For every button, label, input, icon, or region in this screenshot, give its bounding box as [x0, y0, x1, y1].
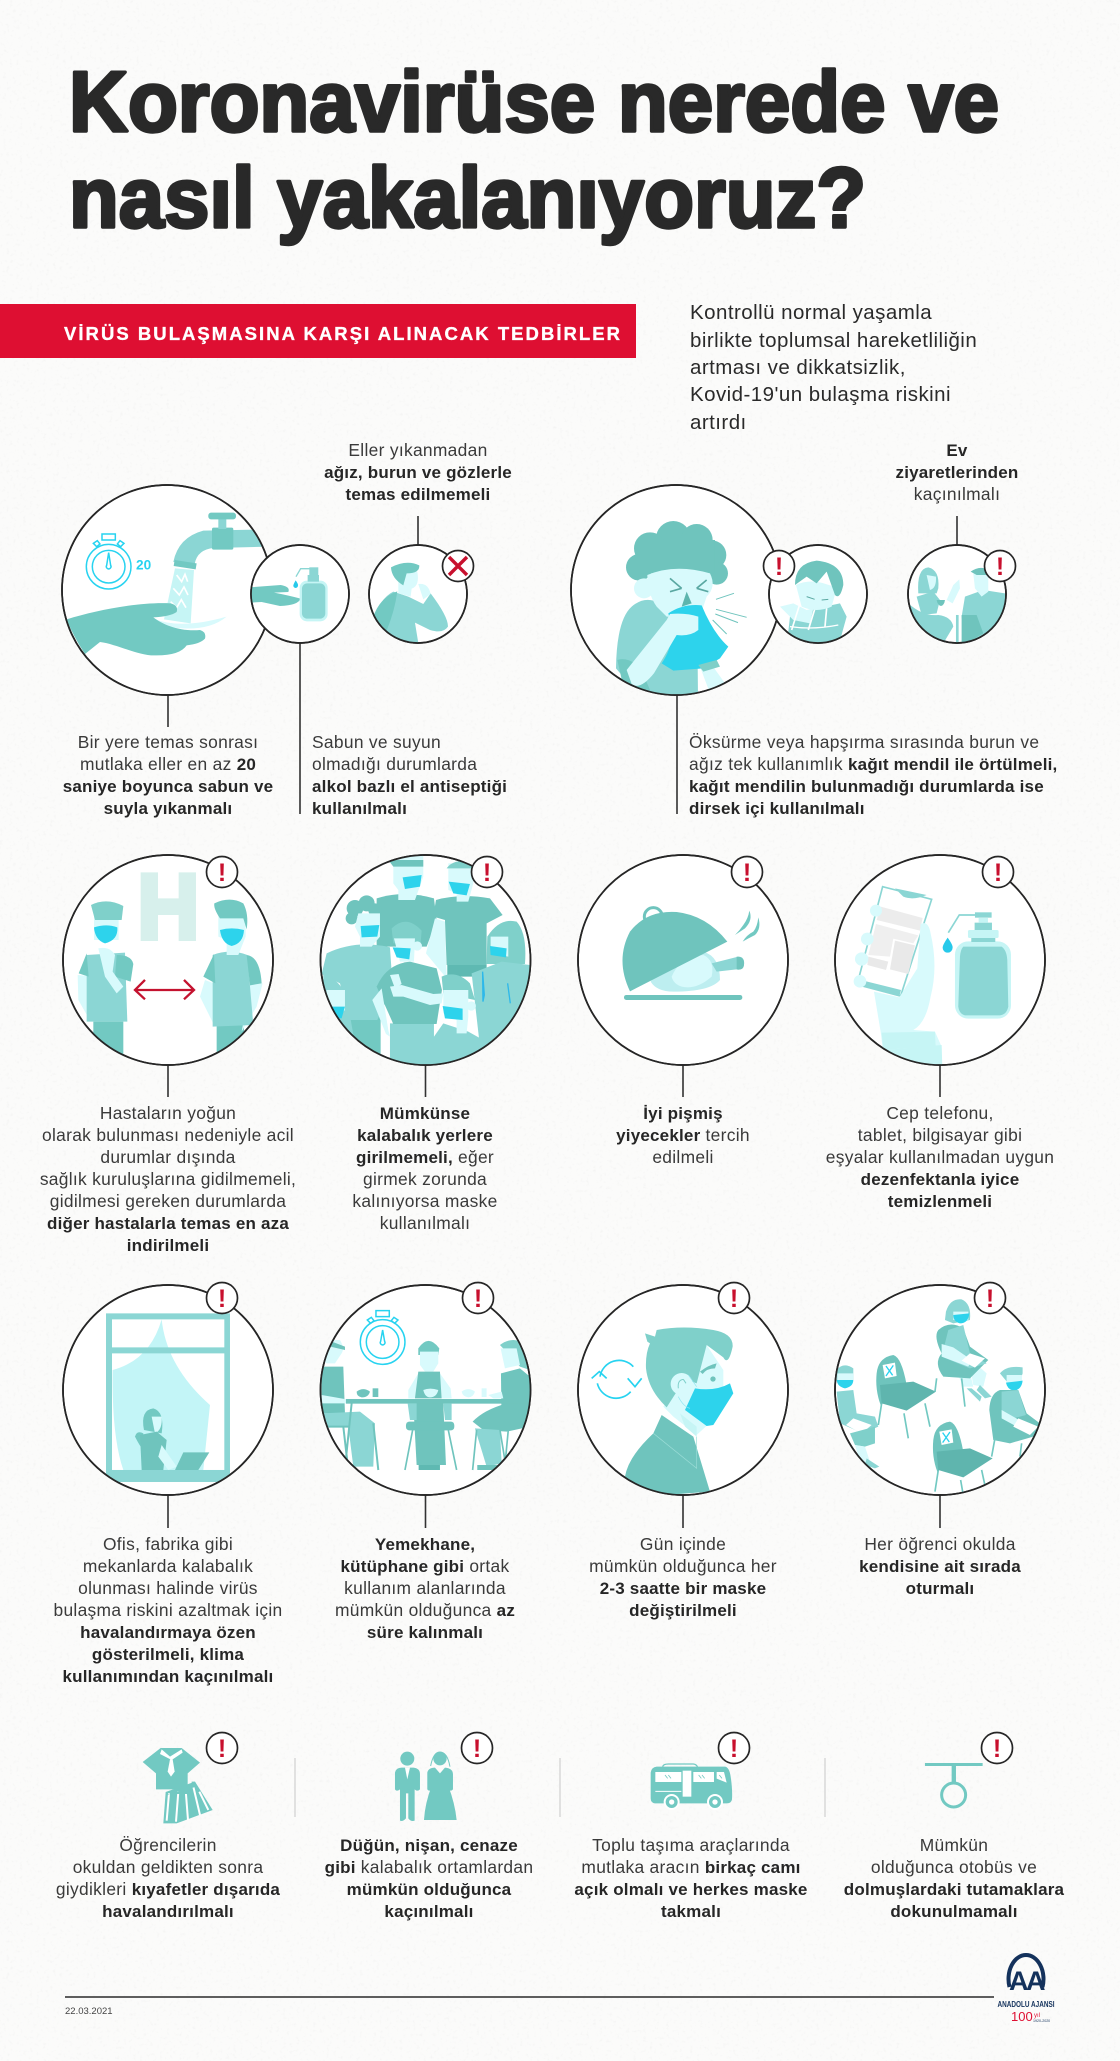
text: hospitals: olarak bulunması nedeniyle acil: [42, 1125, 294, 1145]
text: hand straps: dokunulmamalı: [890, 1902, 1018, 1921]
text: hand straps: Mümkün: [920, 1835, 988, 1855]
logo: Anadolu Ajansı: 1920-2020: [1033, 2019, 1050, 2023]
panel: man touching face illustration: [369, 545, 467, 645]
text: covering mouth when coughing: dirsek içi kullanılmalı: [689, 799, 865, 818]
text: students clothes: [56, 1835, 280, 1921]
text: alcohol based antiseptic: olmadığı durumlarda: [312, 754, 477, 774]
text: canteen and library: süre kalınmalı: [367, 1623, 483, 1642]
text: cooked food: yiyecekler tercih: [616, 1125, 750, 1145]
icon: warning badge: !: [993, 1735, 1001, 1763]
text: 20 seconds washing: mutlaka eller en az 20: [80, 754, 256, 774]
text: students clothes: giydikleri kıyafetler dışarıda: [56, 1879, 280, 1899]
top student: [935, 1299, 992, 1407]
icon: bus: [651, 1764, 732, 1810]
panel: cooked food illustration: [578, 855, 788, 1065]
text: public transport: Toplu taşıma araçlarında: [592, 1835, 790, 1855]
text: cooked food: İyi pişmiş: [643, 1104, 723, 1123]
text: students clothes: okuldan geldikten sonra: [73, 1857, 263, 1877]
icon: warning badge: !: [218, 859, 226, 887]
text: crowded places: kalınıyorsa maske: [352, 1191, 498, 1211]
text: hand straps: [844, 1835, 1065, 1921]
text: mask replacement: [589, 1534, 777, 1620]
text: weddings and funerals: gibi kalabalık ortamlardan: [325, 1857, 533, 1877]
panel: canteen table illustration: [320, 1285, 530, 1495]
text: school desks: Her öğrenci okulda: [864, 1534, 1016, 1554]
logo: Anadolu Ajansı: 100: [1011, 2009, 1033, 2024]
title: nasıl yakalanıyoruz?: [69, 151, 866, 246]
text: covering mouth when coughing: ağız tek kullanımlık kağıt mendil ile örtülmeli,: [689, 754, 1057, 774]
text: eyes and mouth warning: temas edilmemeli: [346, 485, 490, 504]
connector lines second and third rows: [168, 1064, 940, 1528]
icon: warning badge: [974, 1282, 1006, 1314]
text: home visits: [896, 441, 1018, 504]
text: covering mouth when coughing: Öksürme veya hapşırma sırasında burun ve: [689, 732, 1039, 752]
banner: measures heading: VİRÜS BULAŞMASINA KARŞI ALINACAK TEDBİRLER: [64, 323, 620, 344]
text: ventilation: mekanlarda kalabalık: [83, 1556, 253, 1576]
icon: school uniform: [143, 1748, 213, 1823]
panel: hand sanitizer illustration: [250, 545, 349, 643]
text: eyes and mouth warning: Eller yıkanmadan: [348, 440, 488, 460]
text: canteen and library: kütüphane gibi ortak: [341, 1556, 509, 1576]
panel: crowd illustration: [320, 855, 530, 1070]
text: cooked food: [616, 1104, 750, 1167]
text: ventilation: olunması halinde virüs: [78, 1578, 258, 1598]
logo: Anadolu Ajansı: [998, 1955, 1054, 2024]
icon: warning badge: !: [218, 1285, 226, 1313]
text: weddings and funerals: kaçınılmalı: [384, 1902, 474, 1921]
panel: school desks illustration: [835, 1285, 1045, 1505]
panel: hospital distance illustration: [63, 855, 273, 1065]
text: school desks: oturmalı: [906, 1579, 974, 1598]
text: school desks: [859, 1534, 1021, 1598]
text: ventilation: kullanımından kaçınılmalı: [63, 1667, 273, 1686]
icon: warning badge: [982, 1732, 1012, 1764]
text: crowded places: kalabalık yerlere: [357, 1126, 493, 1145]
text: mask replacement: değiştirilmeli: [629, 1601, 737, 1620]
text: covering mouth when coughing: kağıt mendilin bulunmadığı durumlarda ise: [689, 777, 1044, 796]
text: weddings and funerals: mümkün olduğunca: [347, 1880, 512, 1899]
panel: hand washing illustration: 20: [136, 557, 152, 572]
icon: bus hand strap: [925, 1763, 983, 1807]
icon: warning badge: [764, 550, 794, 582]
text: eyes and mouth warning: ağız, burun ve gözlerle: [324, 463, 512, 482]
intro text: [690, 301, 977, 434]
icon: warning badge: [462, 1282, 494, 1314]
icon: warning badge: !: [474, 1285, 482, 1313]
icon: warning badge: [982, 856, 1014, 888]
panel: sneezing illustration: [571, 485, 781, 697]
text: crowded places: girmek zorunda: [363, 1169, 487, 1189]
text: ventilation: bulaşma riskini azaltmak için: [53, 1600, 283, 1620]
icon: warning badge: [472, 856, 502, 888]
text: hospitals: sağlık kuruluşlarına gidilmemeli,: [40, 1169, 296, 1189]
text: crowded places: kullanılmalı: [380, 1213, 470, 1233]
text: hospitals: indirilmeli: [127, 1236, 209, 1255]
text: ventilation: havalandırmaya özen: [80, 1623, 256, 1642]
text: students clothes: havalandırılmalı: [102, 1902, 234, 1921]
text: public transport: takmalı: [661, 1902, 721, 1921]
text: canteen and library: Yemekhane,: [375, 1535, 475, 1554]
intro text: birlikte toplumsal hareketliliğin: [690, 329, 977, 352]
chair two: [932, 1422, 992, 1492]
text: home visits: kaçınılmalı: [914, 484, 1000, 504]
text: 20 seconds washing: [63, 732, 273, 818]
text: weddings and funerals: Düğün, nişan, cenaze: [340, 1836, 518, 1855]
text: disinfecting devices: [826, 1103, 1054, 1211]
text: disinfecting devices: tablet, bilgisayar gibi: [858, 1125, 1022, 1145]
footer rule: [65, 1996, 994, 1998]
icon: warning badge: !: [994, 859, 1002, 887]
text: hand straps: olduğunca otobüs ve: [871, 1857, 1037, 1877]
text: disinfecting devices: temizlenmeli: [888, 1192, 992, 1211]
icon: warning badge: !: [775, 553, 783, 581]
text: disinfecting devices: Cep telefonu,: [886, 1103, 994, 1123]
text: mask replacement: mümkün olduğunca her: [589, 1556, 777, 1576]
text: alcohol based antiseptic: kullanılmalı: [312, 799, 407, 818]
dividers: [295, 1758, 825, 1817]
icon: bride and groom: [395, 1752, 457, 1821]
intro text: artırdı: [690, 411, 747, 434]
icon: warning badge: [718, 1732, 750, 1764]
text: crowded places: girilmemeli, eğer: [356, 1147, 494, 1167]
logo: Anadolu Ajansı: ANADOLU AJANSI: [998, 1999, 1054, 2009]
icon: warning badge: !: [730, 1285, 738, 1313]
text: ventilation: gösterilmeli, klima: [92, 1645, 244, 1664]
text: alcohol based antiseptic: [312, 732, 507, 818]
text: hospitals: gidilmesi gereken durumlarda: [50, 1191, 286, 1211]
text: cooked food: edilmeli: [652, 1147, 714, 1167]
icon: prohibition badge: [442, 550, 474, 582]
icon: warning badge: [732, 856, 762, 888]
title: Koronavirüse nerede ve: [69, 55, 999, 150]
intro text: artması ve dikkatsizlik,: [690, 356, 906, 379]
icon: warning badge: !: [483, 859, 491, 887]
text: public transport: mutlaka aracın birkaç camı: [581, 1857, 801, 1877]
panel: phone disinfecting illustration: [835, 855, 1045, 1067]
left student: [837, 1365, 879, 1468]
icon: warning badge: !: [473, 1735, 481, 1763]
icon: warning badge: [984, 550, 1016, 582]
text: 20 seconds washing: Bir yere temas sonrası: [78, 732, 258, 752]
panel: open window illustration: [63, 1285, 273, 1495]
text: mask replacement: Gün içinde: [640, 1534, 726, 1554]
text: canteen and library: mümkün olduğunca az: [335, 1600, 515, 1620]
icon: warning badge: [718, 1282, 750, 1314]
text: eyes and mouth warning: [324, 440, 512, 504]
icon: warning badge: !: [996, 553, 1004, 581]
panel: child coughing illustration: [769, 545, 867, 647]
text: disinfecting devices: dezenfektanla iyice: [861, 1170, 1019, 1189]
text: covering mouth when coughing: [689, 732, 1057, 818]
intro text: Kovid-19'un bulaşma riskini: [690, 383, 951, 406]
text: alcohol based antiseptic: alkol bazlı el antiseptiği: [312, 777, 507, 796]
icon: warning badge: [206, 1732, 238, 1764]
text: 20 seconds washing: saniye boyunca sabun ve: [63, 777, 273, 796]
intro text: Kontrollü normal yaşamla: [690, 301, 932, 324]
chair one: [876, 1355, 936, 1438]
text: home visits: ziyaretlerinden: [896, 463, 1018, 482]
text: canteen and library: [335, 1535, 515, 1642]
text: disinfecting devices: eşyalar kullanılmadan uygun: [826, 1147, 1054, 1167]
icon: warning badge: [462, 1732, 492, 1764]
text: hospitals: [40, 1103, 296, 1255]
icon: warning badge: !: [218, 1735, 226, 1763]
panel: changing mask illustration: [578, 1285, 788, 1497]
text: hospitals: diğer hastalarla temas en aza: [47, 1214, 289, 1233]
text: ventilation: Ofis, fabrika gibi: [103, 1534, 233, 1554]
text: mask replacement: 2-3 saatte bir maske: [600, 1579, 766, 1598]
text: hospitals: Hastaların yoğun: [100, 1103, 236, 1123]
text: 20 seconds washing: suyla yıkanmalı: [104, 799, 232, 818]
text: crowded places: Mümkünse: [380, 1104, 470, 1123]
icon: warning badge: !: [743, 859, 751, 887]
icon: warning badge: [206, 856, 238, 888]
logo: Anadolu Ajansı: yıl: [1034, 2013, 1040, 2019]
text: hand straps: dolmuşlardaki tutamaklara: [844, 1880, 1065, 1899]
text: home visits: Ev: [946, 441, 968, 460]
text: students clothes: Öğrencilerin: [119, 1835, 217, 1855]
banner: measures heading: [0, 304, 636, 358]
text: canteen and library: kullanım alanlarında: [344, 1578, 506, 1598]
text: school desks: kendisine ait sırada: [859, 1557, 1021, 1576]
panel: hand washing illustration: [62, 485, 272, 695]
text: weddings and funerals: [325, 1836, 533, 1921]
text: public transport: [574, 1835, 808, 1921]
text: ventilation: [53, 1534, 283, 1686]
connector lines top row: [168, 516, 957, 814]
panel: home visit illustration: [908, 545, 1006, 645]
logo: Anadolu Ajansı: AA: [1009, 1966, 1045, 1996]
icon: warning badge: !: [986, 1285, 994, 1313]
icon: warning badge: [206, 1282, 238, 1314]
text: public transport: açık olmalı ve herkes maske: [574, 1880, 808, 1899]
title: [69, 55, 999, 246]
icon: warning badge: !: [730, 1735, 738, 1763]
text: crowded places: [352, 1104, 498, 1233]
right student: [989, 1367, 1040, 1457]
text: hospitals: durumlar dışında: [100, 1147, 236, 1167]
date: 22.03.2021: [65, 2006, 113, 2017]
text: alcohol based antiseptic: Sabun ve suyun: [312, 732, 441, 752]
